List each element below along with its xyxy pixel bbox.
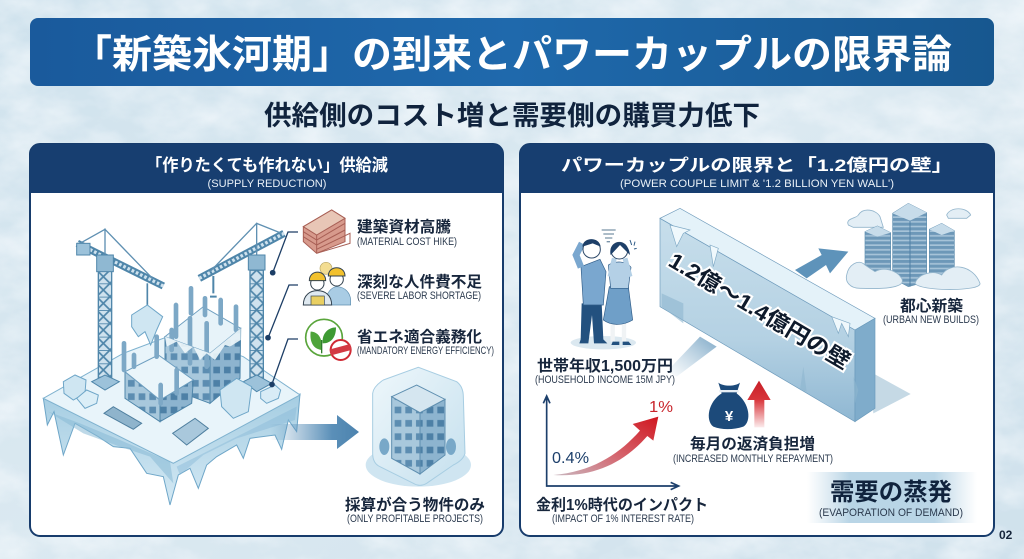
urban towers and clouds [846,203,980,290]
caption: monthly repayment [673,434,833,465]
caption: interest impact: (IMPACT OF 1% INTEREST RATE) [552,513,694,525]
item: material cost hike: 建築資材高騰 [357,217,451,236]
callout: evaporation of demand [807,472,977,523]
wall shadow [870,372,911,413]
subtitle: 供給側のコスト増と需要側の購買力低下 [264,101,760,131]
wall label: 1.2億〜1.4億円の壁 [664,248,854,374]
title banner: 「新築氷河期」の到来とパワーカップルの限界論 [72,34,952,77]
small frozen building [124,337,193,422]
panel header: supply reduction [30,144,503,193]
arrow: repayment up [747,381,771,427]
item: labor shortage: (SEVERE LABOR SHORTAGE) [357,290,481,302]
right crane [199,223,284,392]
caption: interest impact: 金利1%時代のインパクト [536,495,708,514]
ice blocks and materials [63,375,281,445]
caption: monthly repayment: (INCREASED MONTHLY REPAYMENT) [673,453,833,465]
title banner [30,18,994,86]
arrow: toward urban builds [795,248,848,278]
caption: household income: 世帯年収1,500万円 [537,356,673,375]
ice platform [43,333,300,505]
illustration: frozen construction site [43,223,300,505]
caption: urban new builds: 都心新築 [900,296,963,315]
caption: interest impact [536,495,708,525]
page number: 02 [999,528,1013,542]
connector lines [266,232,298,387]
caption: urban new builds [883,296,979,326]
arrow: demand blocked by wall [667,337,717,377]
panel: power couple limit [520,144,994,536]
icon: money bag [709,383,748,429]
icon: workers [303,262,351,305]
panel header: power couple limit: パワーカップルの限界と「1.2億円の壁」 [561,156,953,175]
callout: evaporation of demand: (EVAPORATION OF DEMAND) [819,507,963,519]
panel header: supply reduction: 「作りたくても作れない」供給減 [146,156,388,175]
caption: monthly repayment: 毎月の返済負担増 [690,434,815,453]
panel header: supply reduction: (SUPPLY REDUCTION) [208,178,326,190]
icon: building in ice cube [366,367,471,487]
left crane [77,228,163,390]
yen sign: ¥ [725,408,734,425]
couple [571,230,637,349]
large frozen building [165,288,241,403]
item: labor shortage: 深刻な人件費不足 [357,273,482,291]
item: energy efficiency: 省エネ適合義務化 [357,327,482,346]
caption: only profitable projects: (ONLY PROFITABLE PROJECTS) [347,513,483,525]
caption: household income: (HOUSEHOLD INCOME 15M JPY) [535,374,675,386]
item: labor shortage [303,262,482,305]
item: energy efficiency: (MANDATORY ENERGY EFFICIENCY) [357,345,494,357]
illustration: wall scene [543,203,980,490]
chart value: 1%: 1% [649,399,673,416]
arrow: to profitable projects [270,415,359,449]
caption: only profitable projects [345,495,485,525]
chart value: 0.4%: 0.4% [552,450,589,467]
chart axes [543,396,679,490]
caption: household income [535,356,675,386]
icon: leaf and stamp [306,319,352,360]
caption: urban new builds: (URBAN NEW BUILDS) [883,314,979,326]
icon: bricks [303,210,350,253]
item: energy efficiency [306,319,494,360]
panel header: power couple limit [520,144,994,193]
caption: only profitable projects: 採算が合う物件のみ [345,495,485,514]
panel: supply reduction [30,144,503,536]
price wall [660,208,875,422]
callout: evaporation of demand: 需要の蒸発 [830,479,952,506]
arrow: interest rate rise [553,417,658,475]
item: material cost hike: (MATERIAL COST HIKE) [357,236,457,248]
item: material cost hike [303,210,457,253]
panel header: power couple limit: (POWER COUPLE LIMIT & '1.2 BILLION YEN WALL') [620,178,894,190]
